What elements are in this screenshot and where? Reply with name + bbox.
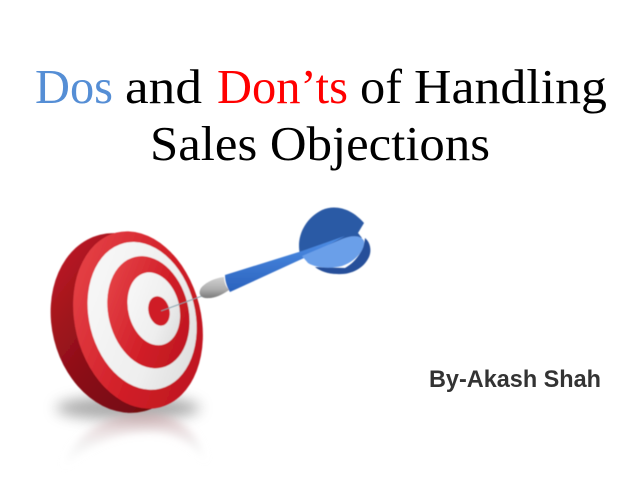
title line 1: of — [360, 59, 403, 114]
title line 1: Dos — [35, 59, 113, 114]
title line 1 — [35, 59, 607, 114]
target face — [55, 217, 221, 423]
dart — [161, 208, 370, 311]
dart needle — [161, 296, 202, 311]
middle red ring — [96, 247, 201, 377]
bullseye — [145, 294, 173, 328]
dart barrel — [200, 277, 229, 298]
title line 1: and — [125, 59, 202, 114]
outer white ring — [73, 230, 212, 401]
target shadow and reflection — [56, 396, 206, 470]
inner white ring — [120, 267, 187, 351]
dart rear flight — [299, 208, 364, 256]
target — [32, 217, 221, 428]
target side — [32, 218, 212, 428]
dart light flight — [302, 236, 364, 268]
dart shaft — [225, 236, 345, 292]
title line 1: Don’ts — [217, 59, 348, 114]
author byline: By-Akash Shah — [429, 366, 601, 393]
dart lower flight — [315, 238, 370, 274]
title — [35, 59, 607, 171]
title line 2: Sales Objections — [150, 116, 490, 171]
title line 1: Handling — [414, 59, 607, 114]
